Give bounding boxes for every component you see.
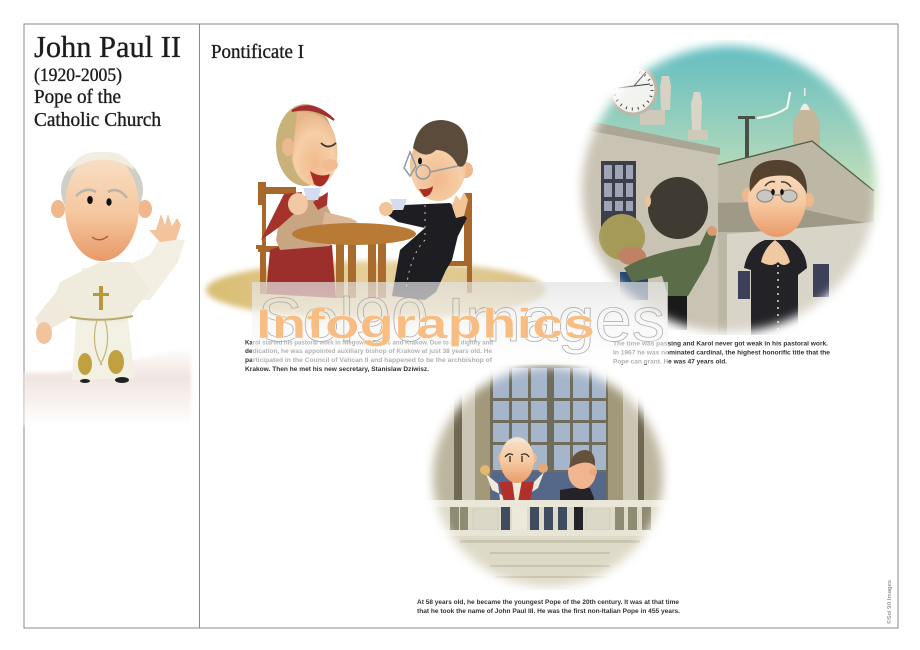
left chair: [256, 182, 296, 294]
white vestment through rail: [512, 507, 527, 533]
boy: blue body: [620, 272, 648, 300]
priest raised hand: [452, 192, 468, 218]
crowd balusters: [501, 507, 567, 530]
caption: scene 3: At 58 years old, he became the youngest Pope of the 20th century. It was at that time: [417, 599, 680, 606]
priest glasses: [404, 152, 458, 179]
hair: [61, 154, 143, 226]
priest buttons: [777, 265, 779, 330]
table legs: [336, 240, 386, 298]
watermark: Sol90 Images: Sol90 Images: [258, 286, 665, 355]
window panes: [493, 368, 606, 470]
robe: [72, 268, 135, 380]
statue left: [660, 76, 671, 110]
cardinal hair: [276, 104, 334, 186]
red cape: [261, 192, 328, 240]
waving hand: [149, 214, 181, 242]
priest ears: [742, 188, 750, 202]
watermark: [252, 282, 668, 364]
stole emblems: [78, 353, 92, 375]
priest ear: [459, 162, 473, 178]
floor shadow: [24, 346, 191, 426]
window frame: [490, 365, 608, 505]
raised finger: [707, 226, 717, 236]
scene 3: balcony: [425, 360, 675, 590]
cardinal torso: [276, 196, 336, 250]
balusters: [450, 507, 651, 530]
watermark panel: [252, 282, 668, 364]
caption: scene 2: The time was passing and Karol never got weak in his pastoral work.: [613, 340, 828, 348]
secretary body: [560, 488, 594, 503]
priest brows: [765, 182, 791, 187]
dates: (1920-2005): [34, 65, 122, 86]
caption: scene 2: [613, 340, 831, 366]
rail base: [425, 530, 675, 536]
copyright credit: ©Sol 90 Images: [886, 580, 893, 624]
cupola dome: [800, 88, 810, 110]
olive wall beside window: [475, 378, 623, 500]
secretary hair: [569, 450, 595, 468]
brows: [76, 190, 127, 198]
panel heading: Pontificate I: [211, 41, 304, 63]
cardinal nose: [322, 159, 338, 171]
role line 2: Catholic Church: [34, 109, 161, 131]
priest mouth: [419, 186, 433, 197]
caption: scene 1: Krakow. Then he met his new secretary, Stanislaw Dziwisz.: [245, 366, 429, 373]
caption: scene 1: participated in the Council of Vatican II and happened to be the archbishop of: [245, 357, 493, 364]
left window: [601, 161, 636, 227]
priest hair: [750, 160, 807, 194]
pillars: [462, 372, 638, 502]
pope head: [500, 437, 534, 483]
wall: [425, 360, 675, 505]
clock: [610, 66, 656, 114]
table top: [292, 223, 416, 245]
priest hair: [413, 120, 468, 167]
caption: scene 3: that he took the name of John Paul III. He was the first non-Italian Pope in 455 years.: [417, 608, 680, 615]
scene 1: cardinal and priest at table: [206, 104, 546, 319]
pope neck scarf: [512, 480, 522, 502]
priest face: [410, 131, 466, 201]
chimney smoke: [757, 92, 790, 118]
green jacket figure: legs: [667, 295, 687, 330]
pope hands: [480, 465, 490, 475]
title: John Paul II: [34, 29, 181, 64]
caption: scene 2: In 1967 he was nominated cardinal, the highest honorific title that the: [613, 350, 831, 356]
clock hands: [618, 72, 650, 88]
boy: blond head: [599, 214, 645, 260]
belt: [70, 316, 133, 320]
lower windows: [738, 264, 829, 299]
scene 2: priest in front of the Vatican: [570, 40, 890, 335]
caption: scene 3: [417, 599, 680, 615]
illustration: waving pope: [24, 152, 191, 426]
balcony floor and steps: [425, 505, 675, 590]
sidebar heading: [34, 29, 181, 131]
eyes: [87, 196, 93, 204]
role line 1: Pope of the: [34, 86, 121, 108]
pope ears: [498, 453, 504, 463]
balcony rail: [425, 500, 675, 507]
cardinal ear: [282, 138, 294, 156]
lower white building: [727, 222, 875, 335]
balcony panels: [473, 509, 610, 530]
caption: scene 1: Karol started his pastoral work in Niegowic, Tyniec and Krakow. Due to his dignity and: [245, 340, 493, 346]
green jacket figure: head: [648, 177, 708, 239]
cardinal arm on table: [322, 212, 358, 226]
cross pendant: [93, 286, 109, 310]
left cornice: [592, 122, 720, 155]
pope red vestment: [499, 482, 534, 502]
pope cap: [505, 438, 529, 445]
right chair: [440, 193, 472, 293]
head: [65, 153, 139, 261]
cape: [54, 262, 150, 322]
left arm and hand: [35, 285, 80, 334]
priest buttons: [406, 205, 425, 290]
waving arm: [120, 238, 185, 300]
clock numerals: [614, 71, 652, 109]
steps: [460, 540, 640, 578]
cardinal hand and cup: [288, 193, 308, 215]
zucchetto: [292, 106, 334, 120]
cornice: [710, 202, 870, 232]
smile: [92, 236, 108, 240]
sky: [570, 40, 890, 230]
right building: [710, 142, 874, 335]
priest eyes: [771, 189, 775, 195]
skullcap: [68, 152, 134, 172]
secretary head: [568, 455, 596, 489]
clock pedestal: [640, 110, 708, 140]
cardinal skirt: [266, 242, 336, 298]
statue right: [691, 92, 702, 130]
cardinal mouth: [310, 171, 330, 186]
caption: scene 1: [245, 340, 493, 373]
window frame: [601, 161, 636, 227]
praying hands: [761, 240, 790, 265]
ears: [51, 200, 65, 218]
sidebar divider: [198, 24, 200, 628]
chimney: [738, 116, 755, 158]
window panes: [604, 165, 633, 211]
caption: scene 1: dedication, he was appointed auxiliary bishop of Krakow at just 38 years old. He: [245, 348, 493, 355]
dark recess: [454, 372, 644, 502]
priest hand with cup: [379, 202, 393, 216]
left building: [575, 120, 718, 335]
cardinal eye: [321, 143, 336, 146]
priest glasses: [757, 190, 797, 202]
shoes: [80, 379, 90, 383]
city view: [492, 472, 606, 502]
green jacket: [624, 228, 716, 296]
cardinal face: [292, 112, 337, 186]
secretary hand: [589, 468, 597, 476]
priest eye: [418, 158, 422, 164]
pope face: [505, 454, 529, 462]
priest face: [748, 176, 806, 237]
cupola tower: [793, 108, 820, 145]
pope sleeves: [486, 472, 544, 500]
parquet floor: [206, 261, 546, 319]
priest cassock: [386, 203, 463, 300]
table: [292, 223, 416, 298]
watermark: Infographics: Infographics: [256, 300, 595, 347]
caption: scene 2: Pope can grant. He was 47 years old.: [613, 358, 727, 366]
roof edge: [710, 141, 874, 191]
priest cassock: [744, 240, 807, 335]
